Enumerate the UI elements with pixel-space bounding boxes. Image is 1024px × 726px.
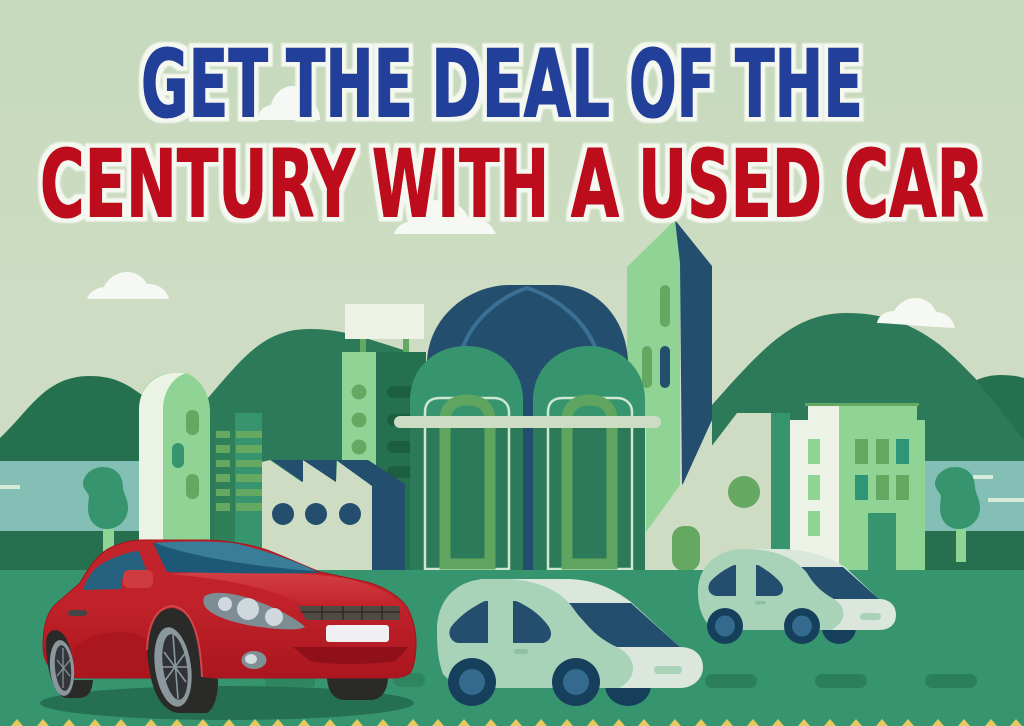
- hood highlight: [170, 572, 404, 608]
- front wheel: [147, 606, 218, 713]
- fog light: [242, 651, 266, 669]
- headlight: [203, 593, 305, 629]
- cloud: behind title: [258, 86, 320, 120]
- title line 2: WITH: [372, 130, 549, 240]
- cloud: left: [87, 272, 169, 299]
- title line 1: GET: [141, 30, 268, 140]
- mirror: [123, 570, 153, 588]
- windshield reflection: [155, 542, 316, 571]
- building: domed hall: [394, 285, 661, 571]
- tree: right: [935, 467, 980, 562]
- hill: far right: [960, 375, 1024, 470]
- title line 1: [141, 30, 863, 140]
- grille: [298, 606, 400, 620]
- title line 1: THE: [286, 30, 413, 140]
- windshield: [153, 542, 320, 573]
- title line 2: CENTURY: [40, 130, 356, 240]
- rear wheel: [46, 630, 93, 698]
- title line 1: OF: [629, 30, 715, 140]
- title line 2: A: [571, 130, 619, 240]
- side window: [83, 551, 147, 590]
- water band: left: [0, 461, 142, 532]
- building: angled hall: [646, 413, 790, 571]
- hill: far left: [0, 376, 142, 470]
- building: silo: [139, 373, 210, 571]
- water band: right: [920, 461, 1024, 532]
- building: bell tower: [627, 220, 712, 532]
- door handle: [68, 610, 87, 616]
- title line 1: THE: [735, 30, 863, 140]
- cloud: right: [877, 298, 955, 328]
- tree: left: [83, 467, 128, 552]
- car: large green near: [437, 579, 703, 706]
- door shade: [73, 632, 147, 677]
- building: striped block: [215, 413, 262, 571]
- embankment: right: [920, 531, 1024, 571]
- licence plate: [326, 625, 389, 642]
- hill: centre left: [208, 329, 410, 571]
- lower intake: [293, 647, 408, 664]
- car shadow: [40, 672, 425, 720]
- title line 1: DEAL: [431, 30, 610, 140]
- hill: right: [712, 313, 1024, 480]
- title line 2: [40, 130, 984, 240]
- embankment: left: [0, 531, 142, 571]
- road: [0, 570, 1024, 726]
- water ripples: [0, 475, 1024, 502]
- title line 2: USED: [638, 130, 822, 240]
- car: small green far: [698, 549, 896, 644]
- decorative zigzag border: [11, 719, 1022, 726]
- car: red coupe: [40, 540, 425, 720]
- car body: [43, 540, 416, 678]
- building: factory: [262, 460, 405, 571]
- title: [40, 30, 984, 240]
- building: billboard tower: [342, 304, 426, 571]
- road dashes: [705, 674, 977, 688]
- cloud: below title: [394, 200, 496, 234]
- building: office block: [790, 403, 925, 571]
- far-side front tyre: [327, 676, 388, 700]
